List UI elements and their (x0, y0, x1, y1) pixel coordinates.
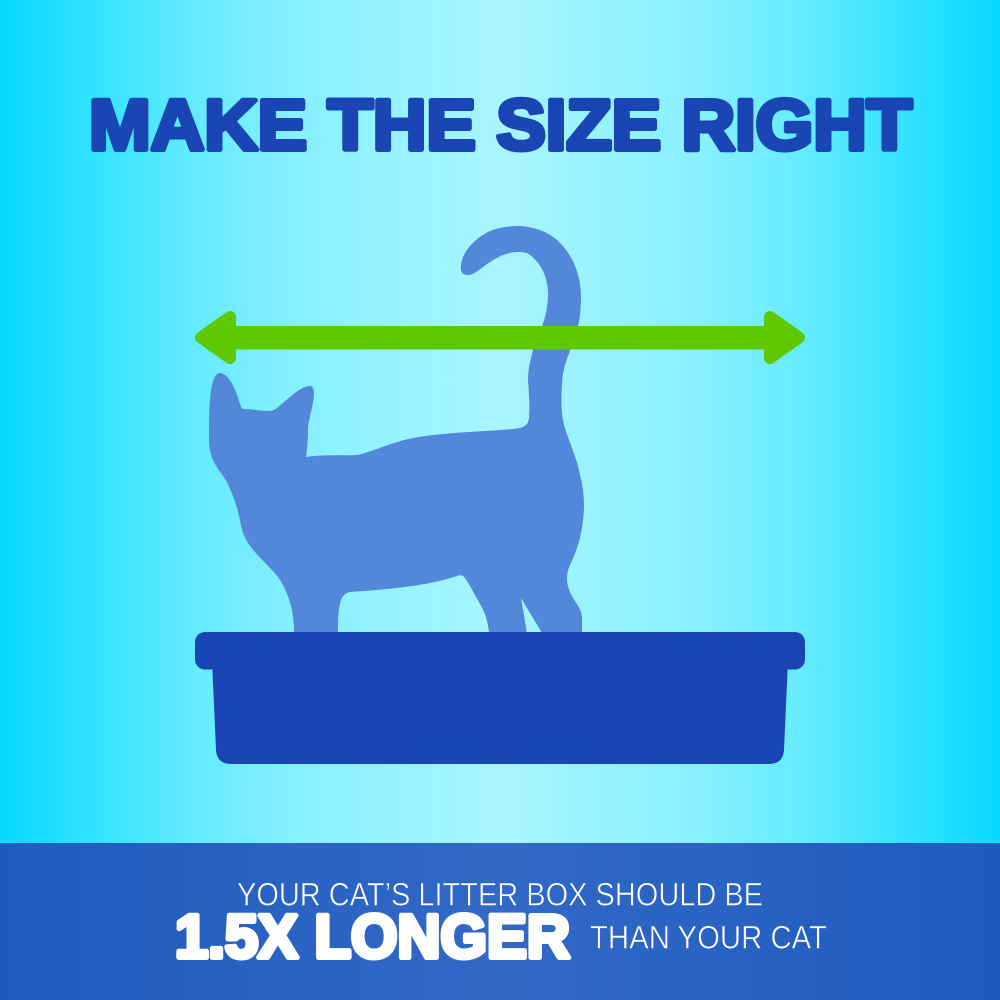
cat silhouette (209, 226, 584, 633)
arrow shaft (232, 326, 768, 350)
banner line two: THAN YOUR CAT (590, 920, 827, 956)
left arrowhead (201, 317, 230, 358)
banner emphasis: 1.5X longer: 1.5X LONGER (175, 902, 570, 970)
litter box rim (195, 632, 805, 670)
litter box tray (212, 660, 788, 764)
banner line one: YOUR CAT’S LITTER BOX SHOULD BE (237, 876, 763, 912)
right arrowhead (770, 317, 799, 358)
arrow: double-headed length indicator (201, 317, 799, 358)
litter box (195, 632, 805, 764)
bottom banner (0, 843, 1000, 1000)
title: MAKE THE SIZE RIGHT (89, 86, 912, 166)
